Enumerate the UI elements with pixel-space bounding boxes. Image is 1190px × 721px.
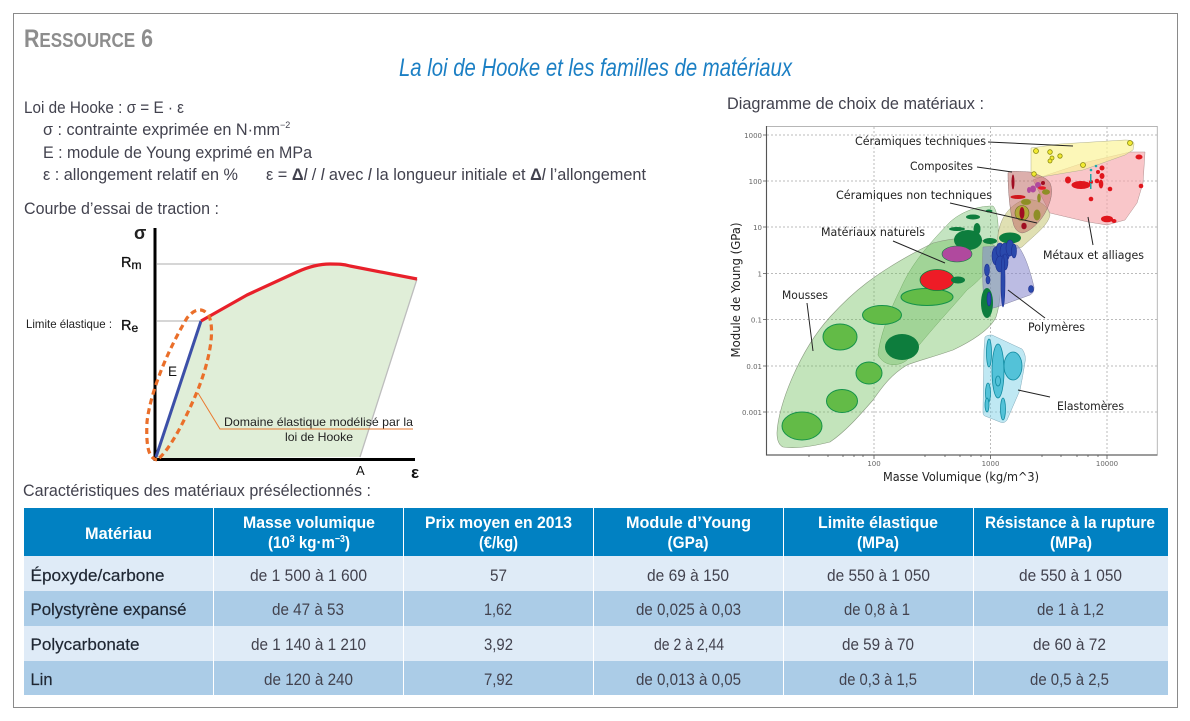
table row: polystyrène expansé: de 47 à 53 — [272, 601, 344, 619]
region: mousses — [777, 238, 1001, 448]
x axis title: Masse Volumique (kg/m^3) — [883, 470, 1039, 484]
plastic curve — [201, 264, 417, 321]
table row: polystyrène expansé: de 1 à 1,2 — [1037, 601, 1104, 619]
bubble: violet — [942, 246, 972, 262]
region: élastomères — [983, 335, 1025, 423]
table — [24, 508, 1168, 695]
table header text: (MPa) — [857, 533, 899, 552]
table header text: 3 — [290, 534, 295, 545]
region labels — [782, 134, 1144, 413]
table row: lin: de 0,3 à 1,5 — [839, 671, 917, 689]
y axis title: Module de Young (GPa) — [729, 222, 743, 358]
chart: courbe de traction: ε — [411, 463, 419, 482]
axes — [155, 228, 415, 460]
elastic domain fill — [155, 264, 417, 458]
table row: polycarbonate: 3,92 — [484, 636, 513, 654]
table row: polycarbonate: de 60 à 72 — [1033, 636, 1106, 654]
region: céramiques techniques — [1031, 140, 1134, 178]
chart: courbe de traction: R — [121, 255, 131, 271]
table header text: Masse volumique — [243, 513, 375, 532]
heading: courbe d'essai: Courbe d’essai de traction : — [24, 200, 219, 218]
text block: loi de Hooke: ε = Δl / l avec l la longueur initiale et Δl l’allongement — [266, 166, 646, 184]
table header text: Limite élastique — [818, 513, 938, 532]
table header background — [24, 508, 1168, 556]
table header text: (€/kg) — [479, 533, 518, 552]
table header text: Résistance à la rupture — [985, 513, 1155, 532]
callout text: Domaine élastique modélisé par la — [224, 415, 413, 429]
table header text: ) — [345, 533, 350, 552]
table header text: −3 — [335, 534, 345, 545]
table row: polystyrène expansé — [30, 600, 1104, 619]
y axis tick labels: 100 — [749, 178, 762, 186]
region: matériaux naturels — [878, 206, 998, 365]
region: polymères — [983, 245, 1034, 310]
table row: époxyde/carbone: de 550 à 1 050 — [1019, 567, 1122, 585]
table row: polycarbonate: de 1 140 à 1 210 — [251, 636, 366, 654]
table header text: (GPa) — [668, 533, 708, 552]
text block: loi de Hooke: ε : allongement relatif en % — [43, 166, 238, 184]
dashed ellipse — [147, 310, 212, 460]
table row: polystyrène expansé: de 0,025 à 0,03 — [636, 601, 741, 619]
text block: loi de Hooke: Loi de Hooke : σ = E · ε — [24, 99, 185, 117]
table row: époxyde/carbone: de 69 à 150 — [647, 567, 729, 585]
region: composites — [1008, 171, 1052, 233]
chart: courbe de traction: Limite élastique : — [26, 317, 112, 331]
plot frame — [766, 126, 1158, 455]
table row: époxyde/carbone — [30, 566, 1122, 585]
chart: courbe de traction: e — [131, 321, 138, 335]
bubble: rouge — [920, 270, 954, 290]
text block: loi de Hooke — [24, 99, 646, 184]
plot background — [766, 126, 1158, 455]
table row: polystyrène expansé: 1,62 — [484, 601, 512, 619]
table row: lin: de 120 à 240 — [264, 671, 353, 689]
y axis tick labels: 10 — [753, 224, 762, 232]
table header text: (10 — [268, 533, 293, 552]
region labels: Elastomères — [1057, 399, 1124, 413]
axis labels: σ — [134, 223, 146, 243]
x axis tick labels — [867, 460, 1118, 468]
table row: polycarbonate: Polycarbonate — [30, 635, 140, 654]
y axis tick labels: 0.01 — [746, 363, 762, 371]
title: La loi de Hooke et les familles de matériaux — [399, 54, 793, 82]
polymer blobs — [984, 240, 1034, 307]
tick marks — [763, 135, 1107, 459]
table row: polystyrène expansé: Polystyrène expansé — [30, 600, 186, 619]
table row: époxyde/carbone: Époxyde/carbone — [30, 566, 164, 585]
y axis tick labels: 0.001 — [742, 409, 762, 417]
chart: courbe de traction: A — [356, 463, 365, 478]
table row: lin: 7,92 — [484, 671, 513, 689]
table row: lin — [30, 670, 1109, 689]
table header text: Module d’Young — [626, 513, 751, 532]
x axis tick labels: 100 — [867, 460, 881, 468]
region: métaux et alliages — [1033, 152, 1145, 225]
table header text: Matériau — [85, 524, 152, 543]
elastomer bubbles — [985, 339, 1022, 420]
y axis tick labels: 0.1 — [751, 316, 762, 324]
elastic line — [156, 321, 201, 457]
table row: époxyde/carbone: de 1 500 à 1 600 — [250, 567, 367, 585]
region labels: Matériaux naturels — [821, 225, 925, 239]
label leaders — [807, 142, 1093, 397]
table row: lin: de 0,013 à 0,05 — [636, 671, 741, 689]
region: céramiques non techniques — [998, 200, 1050, 248]
table row: polycarbonate: de 59 à 70 — [842, 636, 914, 654]
region labels: Composites — [910, 159, 973, 173]
metal bubbles — [1065, 154, 1143, 223]
table row: époxyde/carbone: de 550 à 1 050 — [827, 567, 930, 585]
region labels: Céramiques techniques — [855, 134, 986, 148]
table header text: Prix moyen en 2013 — [425, 513, 572, 532]
ceramic dots — [1032, 140, 1132, 176]
y axis tick labels — [742, 132, 762, 417]
table row: polycarbonate — [30, 635, 1106, 654]
y axis tick labels: 1 — [758, 270, 762, 278]
grid — [767, 127, 1157, 455]
text block: loi de Hooke: −2 — [280, 120, 290, 130]
table header text — [85, 513, 1155, 552]
table row: lin: Lin — [30, 670, 52, 689]
region labels: Mousses — [782, 288, 828, 302]
guide lines — [157, 264, 417, 457]
chart: courbe de traction: R — [121, 318, 131, 334]
region labels: Céramiques non techniques — [836, 188, 992, 202]
heading: diagramme: Diagramme de choix de matériaux : — [727, 95, 984, 113]
table header text: kg·m — [295, 533, 335, 552]
bubble: vert sombre — [951, 276, 965, 284]
chart: courbe de traction: m — [131, 258, 141, 272]
table row: polycarbonate: de 2 à 2,44 — [654, 636, 724, 654]
text block: loi de Hooke: E : module de Young exprimé en MPa — [43, 144, 313, 162]
foam and natural bubbles — [782, 288, 953, 440]
chart: diagramme d'Ashby — [729, 126, 1158, 484]
x axis tick labels: 1000 — [982, 460, 999, 468]
table row backgrounds — [24, 556, 1168, 695]
dark green bubbles — [885, 210, 1021, 360]
chart: courbe de traction: E — [168, 364, 177, 379]
composite bubbles — [1010, 174, 1050, 229]
region labels: Métaux et alliages — [1043, 248, 1144, 262]
table row: polystyrène expansé: de 0,8 à 1 — [844, 601, 910, 619]
chart: courbe de traction — [26, 223, 419, 482]
y axis tick labels: 1000 — [744, 132, 762, 140]
region labels: Polymères — [1028, 320, 1085, 334]
heading: caractéristiques: Caractéristiques des matériaux présélectionnés : — [23, 482, 371, 500]
teal dots — [1090, 165, 1097, 189]
heading: ressource 6: RESSOURCE 6 — [24, 25, 153, 53]
table row: lin: de 0,5 à 2,5 — [1030, 671, 1109, 689]
chart: courbe de traction: loi de Hooke — [285, 430, 353, 444]
callout leader — [198, 393, 413, 429]
table header text: (MPa) — [1050, 533, 1092, 552]
x axis tick labels: 10000 — [1096, 460, 1118, 468]
text block: loi de Hooke: σ : contrainte exprimée en N·mm — [43, 121, 280, 139]
table row: époxyde/carbone: 57 — [490, 567, 507, 585]
